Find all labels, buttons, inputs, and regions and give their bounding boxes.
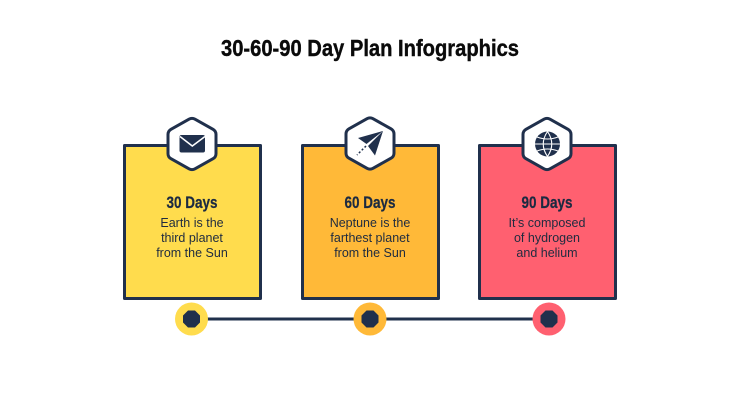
text: description: Neptune is the <box>330 216 410 230</box>
heading: 90 Days: 90 Days <box>522 193 572 212</box>
text: description: Earth is the <box>160 216 224 230</box>
icon: envelope <box>168 118 216 170</box>
panel: 90 days <box>480 118 616 298</box>
timeline marker: 60 days <box>354 302 386 336</box>
card: yellow <box>124 146 260 298</box>
panel: 30 days <box>124 118 260 298</box>
heading: 60 Days: 60 Days <box>344 193 396 212</box>
icon: globe <box>523 118 571 170</box>
timeline marker: 90 days <box>532 302 566 336</box>
timeline marker: 30 days <box>175 302 208 336</box>
card: red <box>480 146 616 298</box>
text: description: and helium <box>516 246 578 260</box>
panel: 60 days <box>302 118 438 298</box>
timeline connector <box>192 318 548 320</box>
text: description: third planet <box>161 231 223 245</box>
icon: paper plane <box>346 118 394 169</box>
text: description: from the Sun <box>156 246 228 260</box>
text: description: It’s composed <box>509 216 585 230</box>
card: orange <box>302 146 438 298</box>
heading: 30 Days: 30 Days <box>166 193 218 212</box>
text: description: from the Sun <box>334 246 406 260</box>
text: description: farthest planet <box>330 231 410 245</box>
text: description: of hydrogen <box>514 231 580 245</box>
title: 30-60-90 Day Plan Infographics <box>221 35 519 61</box>
